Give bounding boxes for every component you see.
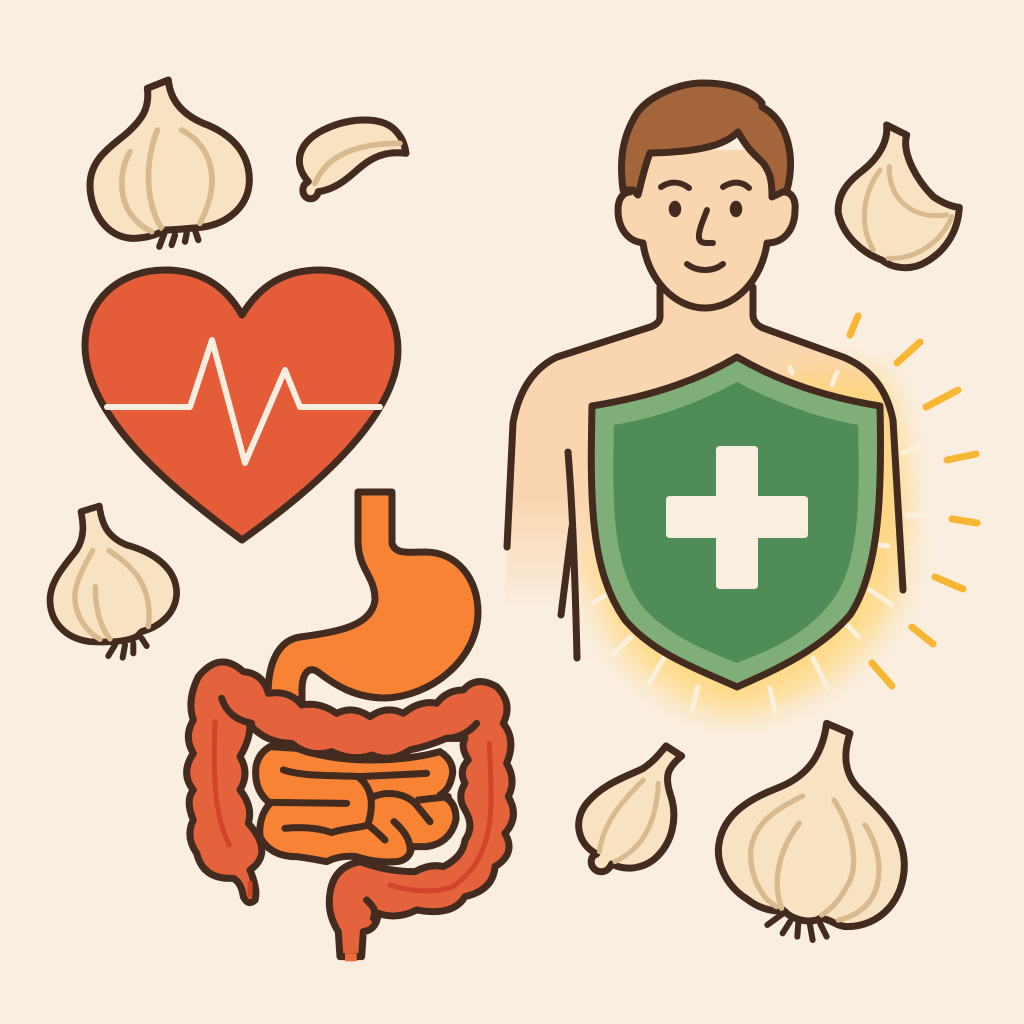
eyes, brows, nose and mouth: [661, 183, 749, 270]
garlic clove: top right: [838, 125, 959, 268]
garlic bulb: top left: [90, 80, 249, 247]
cross: [666, 446, 808, 589]
sun rays: [593, 316, 977, 712]
jaw line: [643, 243, 767, 308]
shield with cross: [591, 357, 881, 687]
stomach: [268, 492, 478, 702]
body outline: [507, 287, 903, 658]
garlic bulb: bottom right: [718, 723, 904, 940]
ears: [618, 192, 795, 243]
hair: [621, 83, 790, 197]
garlic clove: top centre: [299, 120, 406, 199]
person: [504, 83, 906, 715]
large intestine: [187, 662, 513, 957]
garlic bulb: left: [50, 506, 177, 658]
protective glow: [585, 370, 906, 715]
garlic clove: bottom centre: [579, 746, 682, 872]
torso: [504, 287, 903, 620]
digestive tract: [187, 662, 513, 957]
small intestine: [256, 747, 456, 862]
heart with pulse line: [85, 270, 398, 540]
face: [632, 150, 782, 308]
